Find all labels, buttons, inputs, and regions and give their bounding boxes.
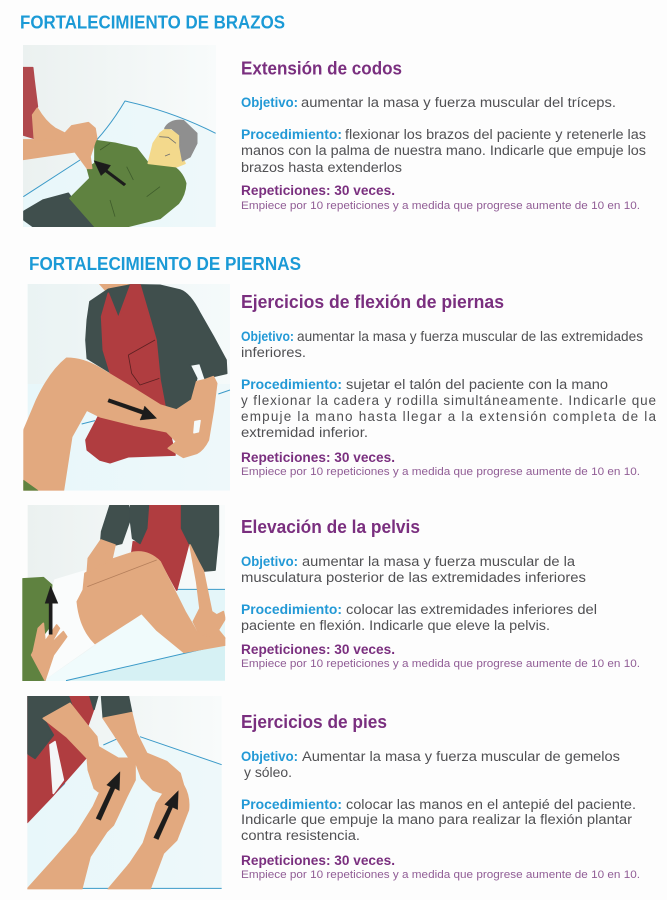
procedimiento: sujetar el talón del paciente con la mano — [346, 377, 608, 392]
repeticiones: Empiece por 10 repeticiones y a medida que progrese aumente de 10 en 10. — [241, 869, 640, 881]
objetivo: inferiores. — [241, 345, 306, 360]
objetivo: aumentar la masa y fuerza muscular de las extremidades — [297, 329, 643, 344]
objetivo: Objetivo: — [241, 95, 298, 110]
heading: Extensión de codos — [241, 58, 402, 78]
objetivo: Objetivo: — [241, 749, 298, 764]
title: fortalecimiento de brazos: FORTALECIMIENTO DE BRAZOS — [20, 12, 285, 32]
procedimiento: paciente en flexión. Indicarle que eleve la pelvis. — [241, 618, 550, 633]
procedimiento: flexionar los brazos del paciente y retenerle las — [345, 127, 646, 142]
repeticiones — [241, 642, 640, 670]
procedimiento: colocar las extremidades inferiores del — [346, 602, 597, 617]
heading: Ejercicios de flexión de piernas — [241, 292, 504, 312]
procedimiento: Procedimiento: — [241, 797, 342, 812]
procedimiento: manos con la palma de nuestra mano. Indicarle que empuje los — [241, 143, 646, 158]
objetivo: Aumentar la masa y fuerza muscular de gemelos — [302, 749, 620, 764]
procedimiento: y flexionar la cadera y rodilla simultáneamente. Indicarle que — [241, 393, 656, 408]
objetivo: musculatura posterior de las extremidades inferiores — [241, 570, 586, 585]
procedimiento — [241, 377, 656, 440]
procedimiento: Indicarle que empuje la mano para realizar la flexión plantar — [241, 812, 633, 827]
section: extensión de codos — [23, 45, 646, 227]
illustration: extensión de codos — [23, 45, 216, 227]
title: fortalecimiento de piernas: FORTALECIMIENTO DE PIERNAS — [29, 253, 301, 274]
objetivo: y sóleo. — [244, 765, 292, 780]
repeticiones — [241, 183, 640, 212]
objetivo — [241, 329, 643, 360]
objetivo: Objetivo: — [241, 329, 294, 344]
objetivo: aumentar la masa y fuerza muscular de la — [302, 554, 576, 569]
objetivo — [241, 554, 586, 585]
illustration: elevación de la pelvis — [22, 505, 225, 681]
repeticiones: Repeticiones: 30 veces. — [241, 450, 395, 465]
repeticiones: Repeticiones: 30 veces. — [241, 183, 395, 198]
procedimiento: contra resistencia. — [241, 828, 360, 843]
heading: Ejercicios de pies — [241, 712, 387, 732]
section: ejercicios de pies — [27, 696, 640, 889]
illustration: ejercicios de pies — [27, 696, 222, 889]
repeticiones — [241, 450, 640, 478]
heading: Elevación de la pelvis — [241, 517, 420, 537]
procedimiento: colocar las manos en el antepié del paciente. — [346, 797, 636, 812]
section: flexión de piernas — [23, 284, 656, 491]
objetivo — [241, 749, 620, 780]
procedimiento: Procedimiento: — [241, 127, 342, 142]
procedimiento: Procedimiento: — [241, 602, 342, 617]
repeticiones: Empiece por 10 repeticiones y a medida que progrese aumente de 10 en 10. — [241, 200, 640, 212]
procedimiento — [241, 797, 636, 843]
procedimiento: Procedimiento: — [241, 377, 342, 392]
section: elevación de la pelvis — [22, 505, 640, 681]
objetivo: aumentar la masa y fuerza muscular del tríceps. — [301, 95, 616, 110]
procedimiento: extremidad inferior. — [241, 425, 368, 440]
repeticiones — [241, 853, 640, 881]
repeticiones: Empiece por 10 repeticiones y a medida que progrese aumente de 10 en 10. — [241, 466, 640, 478]
illustration: flexión de piernas — [23, 284, 230, 491]
repeticiones: Repeticiones: 30 veces. — [241, 853, 395, 868]
procedimiento — [241, 602, 597, 633]
repeticiones: Empiece por 10 repeticiones y a medida que progrese aumente de 10 en 10. — [241, 658, 640, 670]
repeticiones: Repeticiones: 30 veces. — [241, 642, 395, 657]
procedimiento: empuje la mano hasta llegar a la extensión completa de la — [241, 409, 656, 424]
objetivo: Objetivo: — [241, 554, 298, 569]
procedimiento — [241, 127, 646, 175]
procedimiento: brazos hasta extenderlos — [241, 160, 402, 175]
